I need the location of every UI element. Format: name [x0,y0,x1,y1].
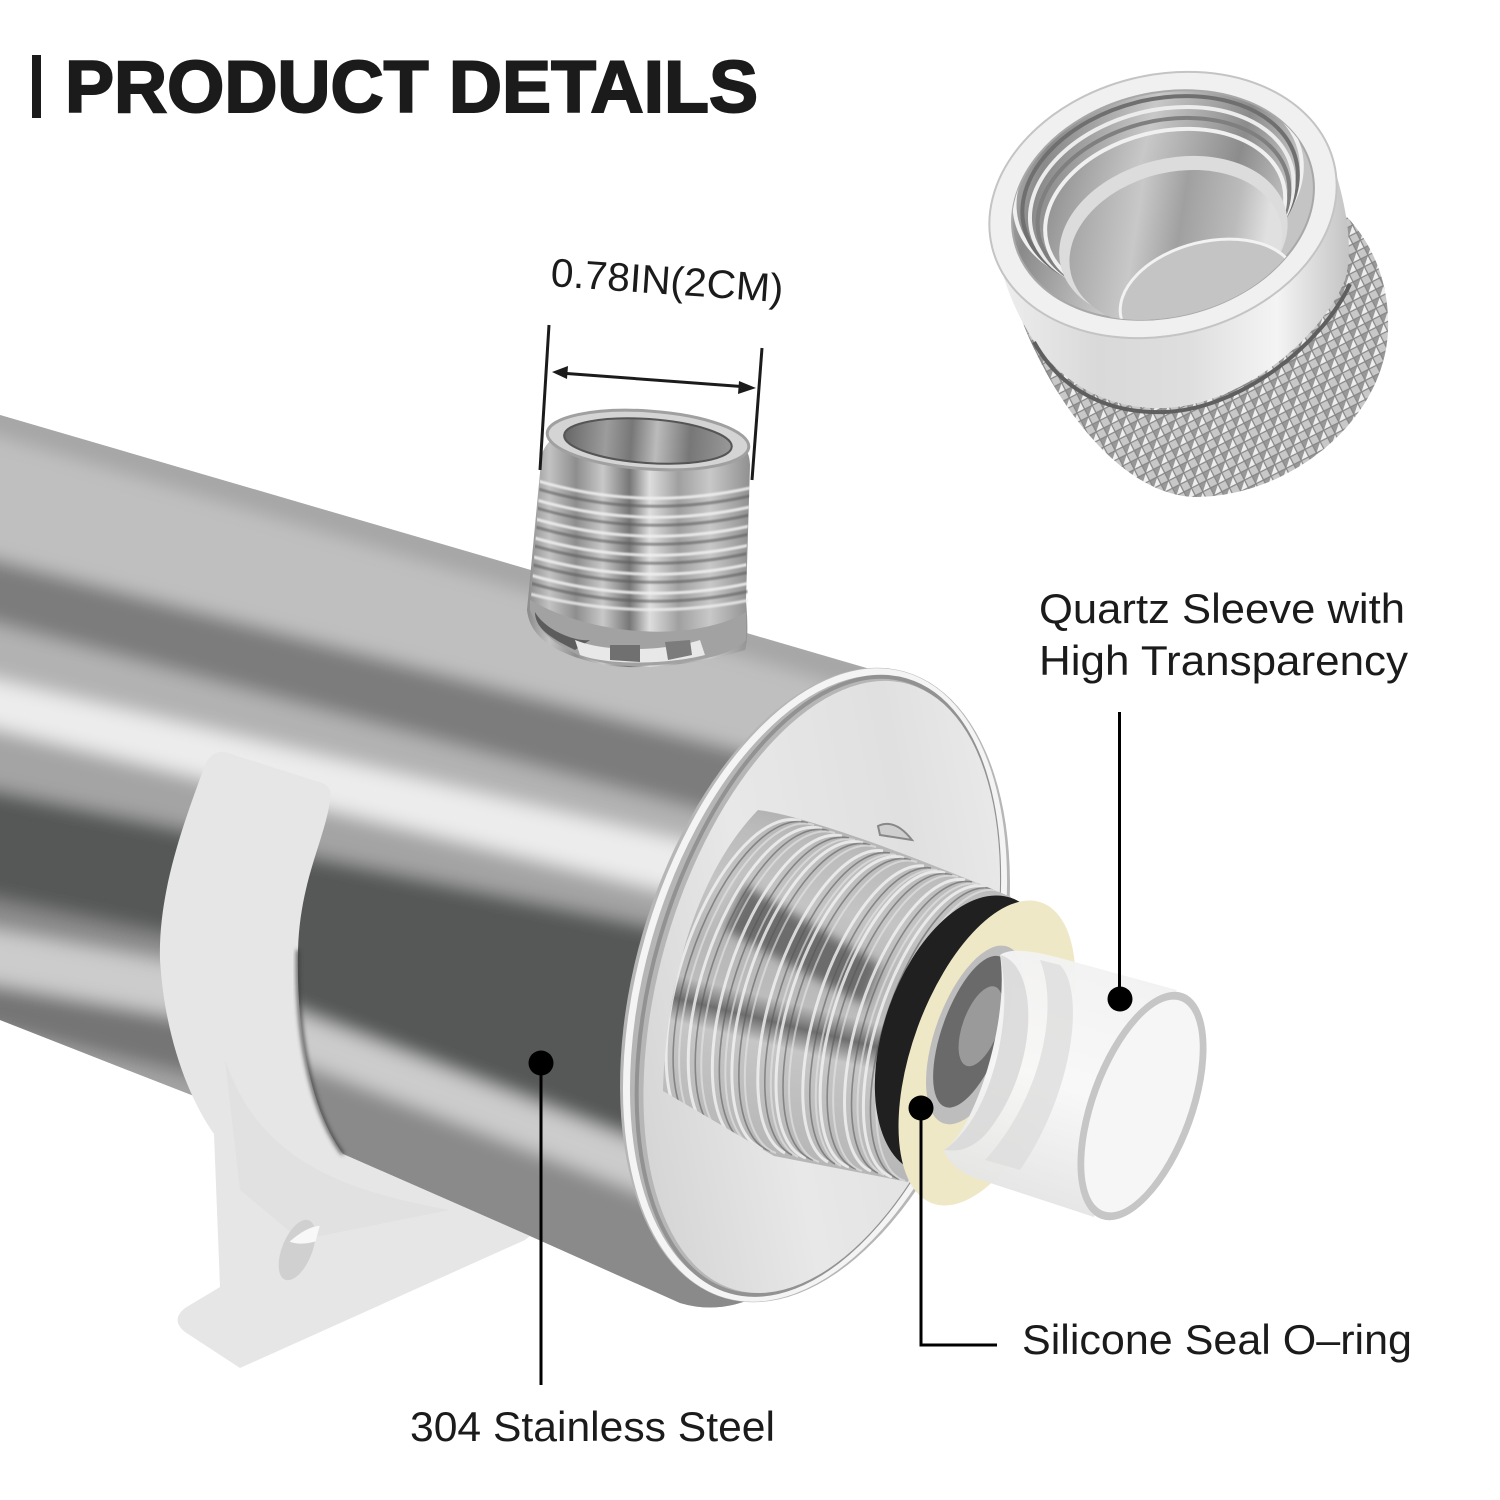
callout: quartz sleeve: Quartz Sleeve with [1039,585,1405,632]
threaded cap [988,70,1388,497]
silicone seal washer [863,877,1111,1229]
tube end cap [552,622,1078,1348]
dimension arrowheads [552,366,756,394]
quartz sleeve [944,951,1233,1237]
cap rim and interior [988,70,1338,339]
threaded outlet [663,810,1011,1182]
port opening [545,404,751,476]
mounting bracket [160,752,530,1368]
callout: silicone seal: Silicone Seal O–ring [1022,1316,1412,1363]
bracket mounting hole [271,1215,323,1285]
sleeve open end [1051,975,1233,1237]
stainless steel tube [0,415,868,1308]
dimension lines [540,325,762,480]
dimension label: 0.78IN(2CM) [549,251,785,311]
threaded inlet port with dimension [527,251,785,667]
callout: quartz sleeve [1039,585,1408,1012]
callout: stainless steel [410,1050,775,1450]
port body [527,442,750,668]
silicone seal o-ring (black) [841,872,1087,1198]
callout: stainless steel: 304 Stainless Steel [410,1403,775,1450]
cap outer band [990,170,1349,408]
callout: silicone seal [908,1096,1412,1363]
title: PRODUCT DETAILS [65,47,758,128]
callout: quartz sleeve: High Transparency [1039,637,1408,684]
cap knurled base [1018,215,1388,497]
